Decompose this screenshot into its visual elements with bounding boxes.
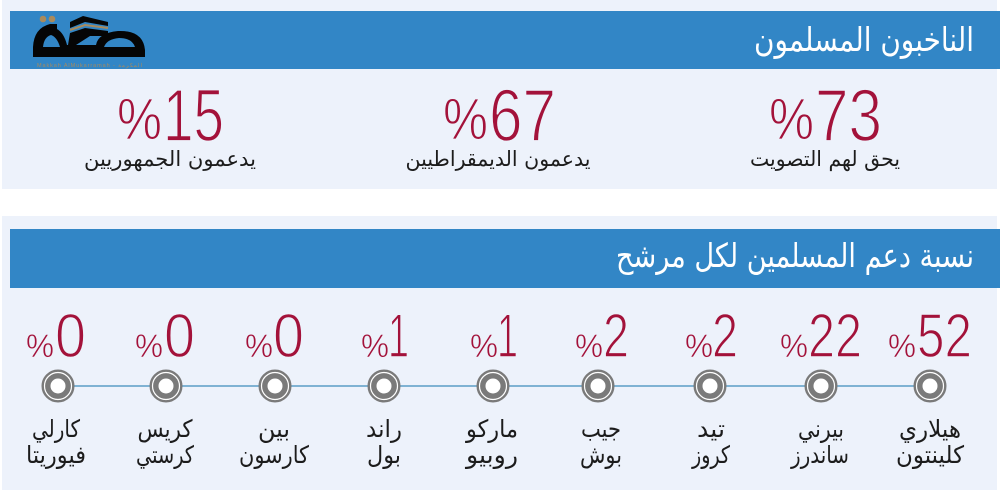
candidate: Paul 1% bbox=[361, 302, 409, 469]
candidate: Rubio 1%: % bbox=[470, 328, 498, 364]
stat: 15% support Republicans bbox=[84, 74, 256, 171]
candidate: Paul 1%: راند bbox=[366, 415, 402, 443]
candidate: Clinton 52%: كلينتون bbox=[896, 441, 965, 469]
candidate: Bush 2%: % bbox=[575, 328, 603, 364]
candidate: Carson 0%: 0 bbox=[273, 302, 304, 371]
candidate: Rubio 1%: ماركو bbox=[465, 415, 518, 443]
candidate: Sanders 22%: % bbox=[780, 328, 808, 364]
candidate: Carson 0%: كارسون bbox=[239, 441, 309, 469]
stat: 15% support Republicans: % bbox=[117, 87, 162, 152]
candidate: Fiorina 0%: % bbox=[26, 328, 54, 364]
stat: 67% support Democrats: 67 bbox=[489, 74, 556, 157]
heading bar: Muslim voters bbox=[10, 11, 1000, 69]
candidate: Fiorina 0% bbox=[26, 302, 86, 469]
candidate: Cruz 2%: % bbox=[685, 328, 713, 364]
candidate: Sanders 22%: بيرني bbox=[798, 415, 844, 443]
candidate: Clinton 52%: هيلاري bbox=[899, 415, 961, 443]
stat: 73% may vote: يحق لهم التصويت bbox=[750, 147, 900, 172]
candidate: Bush 2%: 2 bbox=[603, 302, 629, 371]
candidate: Christie 0%: % bbox=[135, 328, 163, 364]
stat: 15% support Republicans: يدعمون الجمهوريين bbox=[84, 147, 256, 171]
logo: Makkah bbox=[33, 16, 145, 69]
logo: Makkah: Makkah AlMukarramah - المكرمة bbox=[37, 62, 142, 69]
stat: 67% support Democrats: % bbox=[443, 87, 488, 152]
candidate: Paul 1%: % bbox=[361, 328, 389, 364]
stat: 67% support Democrats bbox=[406, 74, 591, 171]
candidate: Clinton 52%: 52 bbox=[917, 302, 972, 371]
candidate: Cruz 2%: 2 bbox=[712, 302, 738, 371]
timeline connector bbox=[58, 385, 930, 387]
candidate: Sanders 22% bbox=[780, 302, 862, 469]
stat: 73% may vote: 73 bbox=[815, 74, 882, 157]
candidate: Clinton 52%: % bbox=[888, 328, 916, 364]
candidate: Paul 1%: بول bbox=[367, 441, 401, 469]
candidate: Carson 0%: بين bbox=[258, 415, 290, 443]
candidate: Paul 1%: 1 bbox=[388, 302, 409, 371]
candidate: Fiorina 0%: 0 bbox=[55, 302, 86, 371]
heading bar: support per candidate bbox=[10, 229, 1000, 288]
candidate: Bush 2% bbox=[575, 302, 629, 469]
candidate: Fiorina 0%: فيوريتا bbox=[26, 441, 86, 469]
candidate: Fiorina 0%: كارلي bbox=[32, 415, 80, 443]
candidate: Bush 2%: بوش bbox=[580, 441, 622, 469]
candidate: Carson 0% bbox=[239, 302, 309, 469]
candidate: Cruz 2%: تيد bbox=[697, 415, 725, 443]
candidate: Cruz 2%: كروز bbox=[691, 441, 730, 469]
candidate: Rubio 1%: 1 bbox=[497, 302, 518, 371]
candidate: Sanders 22%: ساندرز bbox=[790, 441, 849, 469]
panel: Muslim voters bbox=[2, 0, 1000, 189]
candidate: Carson 0%: % bbox=[245, 328, 273, 364]
candidate: Clinton 52% bbox=[888, 302, 972, 469]
candidate: Christie 0%: كرستي bbox=[136, 441, 194, 469]
candidate: Sanders 22%: 22 bbox=[808, 302, 862, 371]
stat: 15% support Republicans: 15 bbox=[163, 74, 224, 157]
candidate: Cruz 2% bbox=[685, 302, 738, 469]
stat: 73% may vote: % bbox=[769, 87, 814, 152]
candidate: Christie 0%: 0 bbox=[164, 302, 195, 371]
candidate: Rubio 1%: روبيو bbox=[465, 441, 518, 469]
stat: 73% may vote bbox=[750, 74, 900, 172]
stat: 67% support Democrats: يدعمون الديمقراطيين bbox=[406, 147, 591, 171]
panel: support per candidate bbox=[2, 216, 1000, 490]
candidate: Rubio 1% bbox=[465, 302, 518, 469]
candidate: Christie 0% bbox=[135, 302, 195, 469]
candidate: Christie 0%: كريس bbox=[138, 415, 193, 443]
candidate: Bush 2%: جيب bbox=[581, 415, 621, 443]
